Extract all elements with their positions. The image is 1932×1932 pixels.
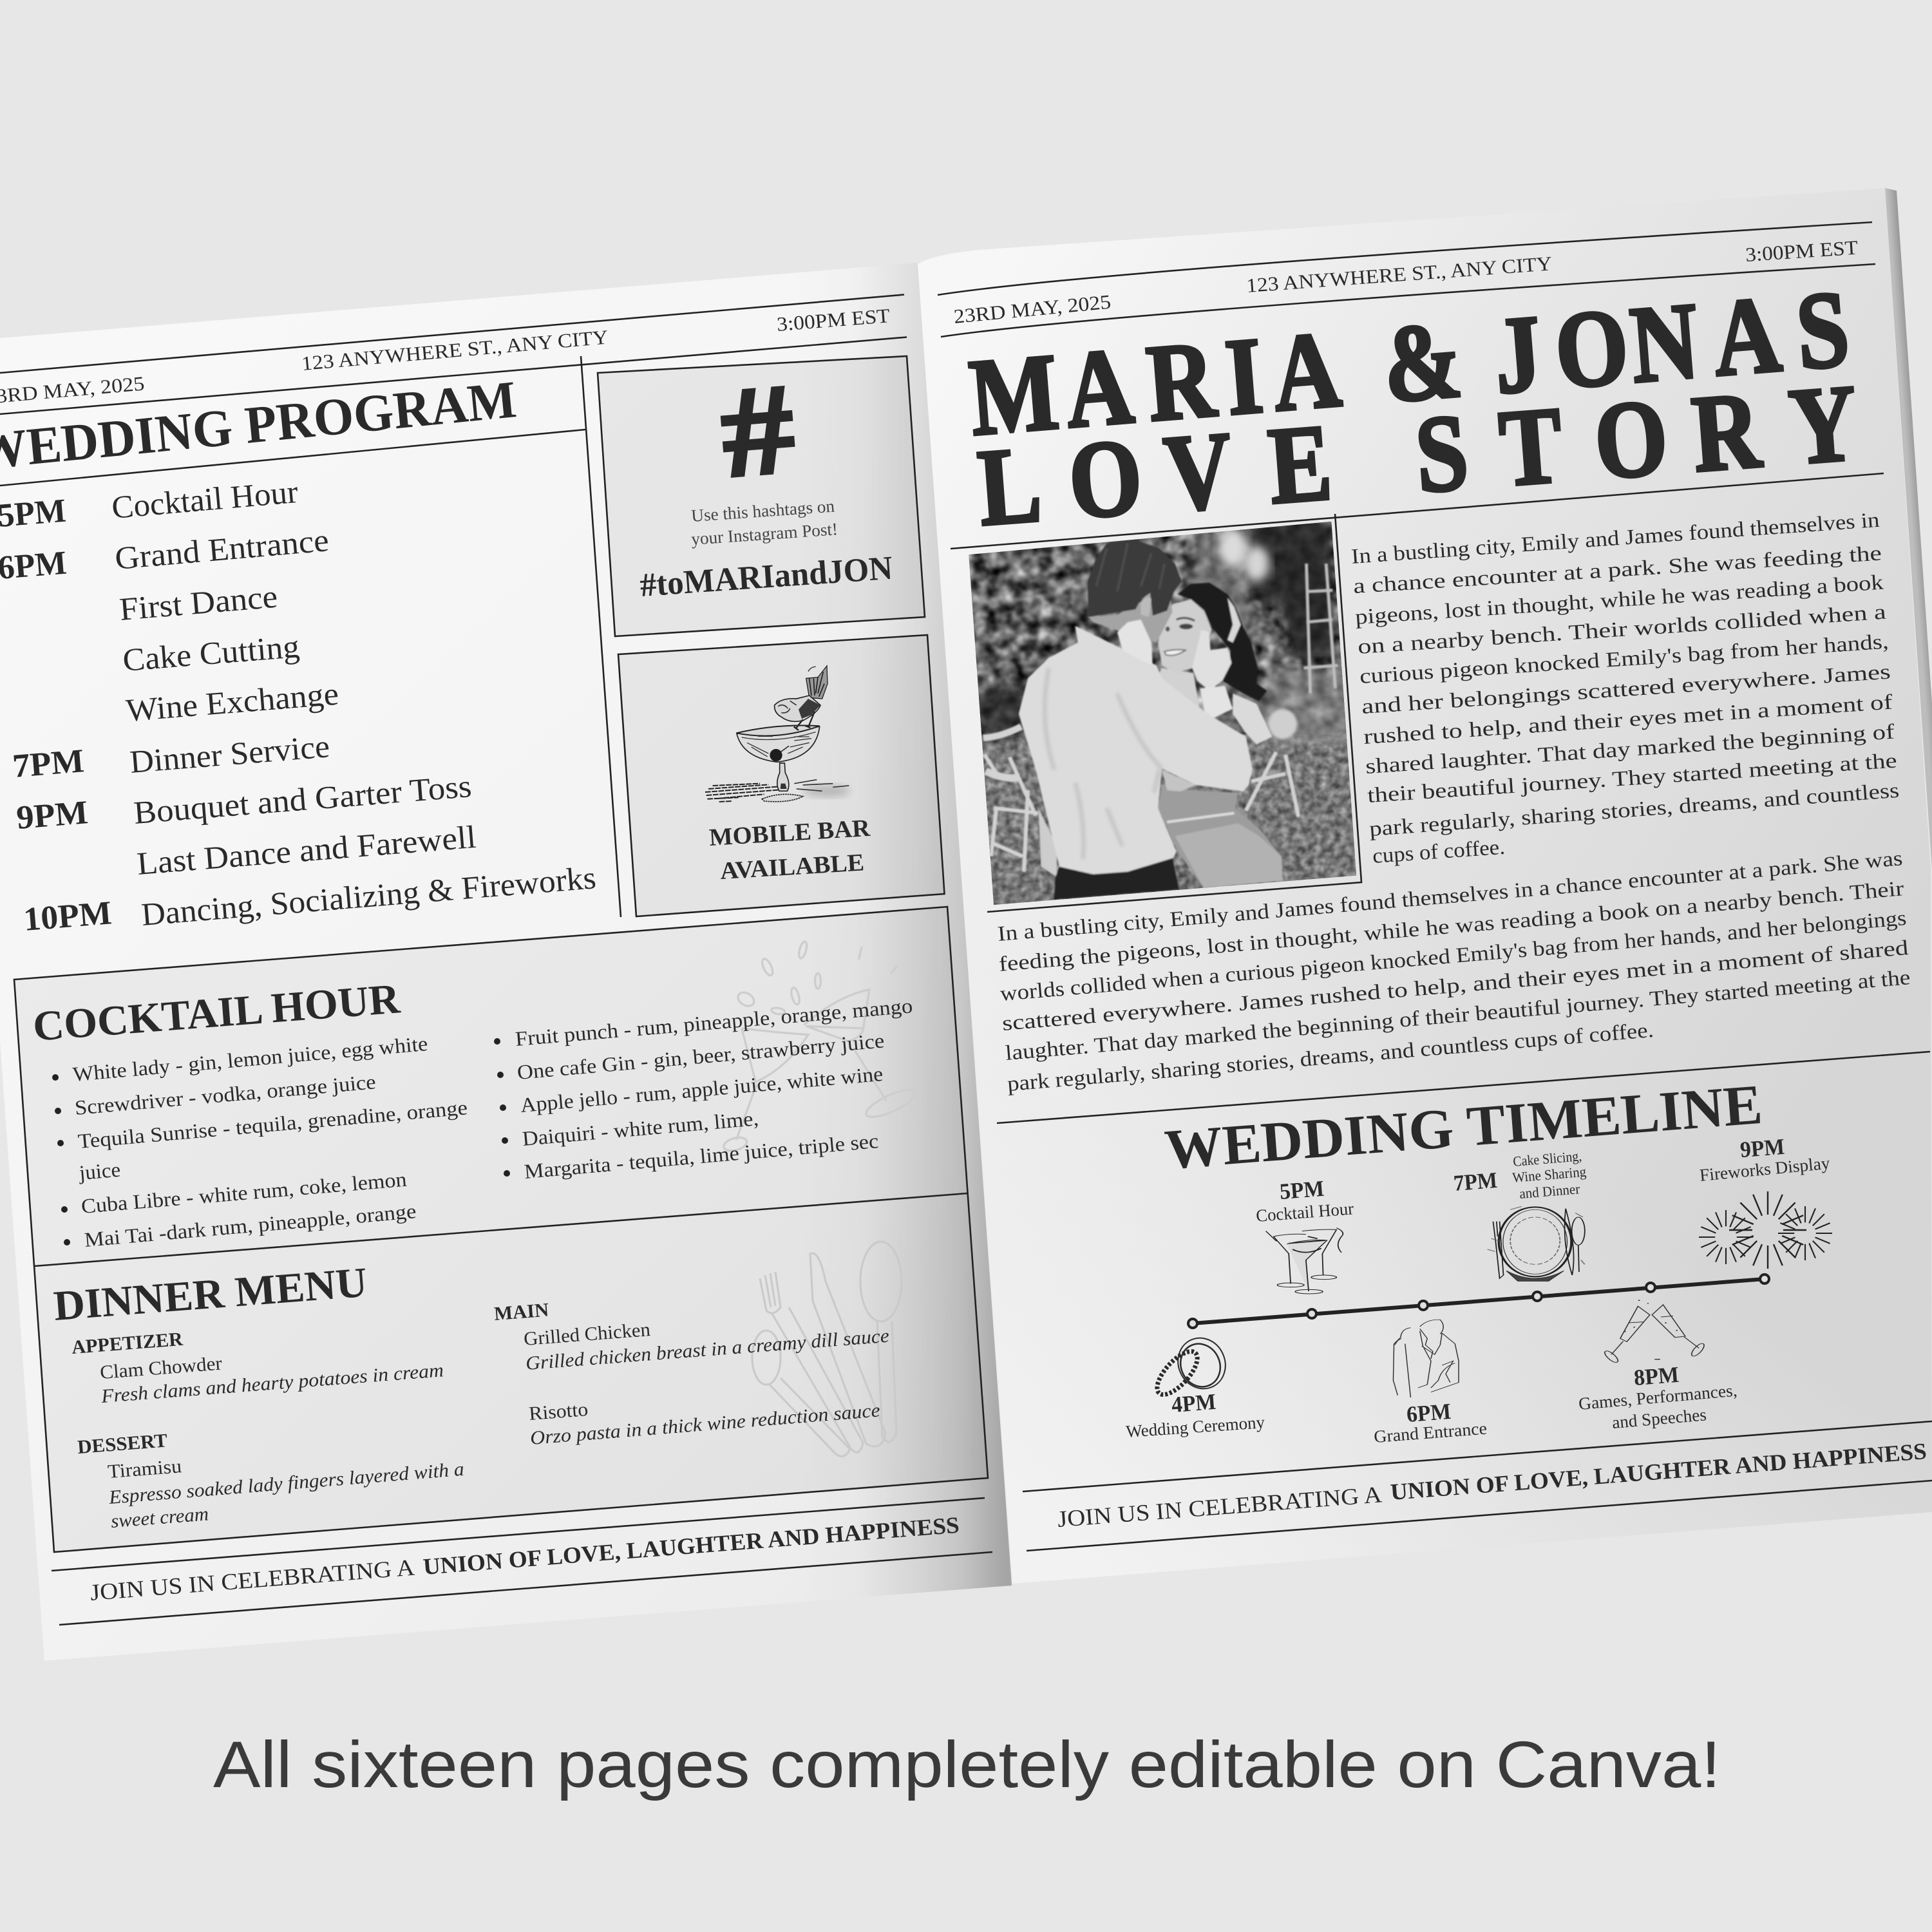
program schedule: Cocktail Hour bbox=[110, 473, 299, 526]
icon: champagne flutes bbox=[1602, 1300, 1707, 1363]
story paragraph one: rushed to help, and their eyes met in a moment of bbox=[1363, 691, 1893, 749]
woman neck and chest bbox=[1159, 667, 1200, 708]
5pm item bbox=[1255, 1176, 1354, 1294]
7pm item: Wine Sharing bbox=[1511, 1163, 1587, 1186]
hashtag instructions: Use this hashtags on bbox=[690, 496, 835, 526]
title: LOVE STORY bbox=[974, 362, 1861, 549]
heading: wedding timeline: WEDDING TIMELINE bbox=[1162, 1074, 1765, 1182]
address: 123 ANYWHERE ST., ANY CITY bbox=[1245, 252, 1553, 297]
icon: couple line art bbox=[1393, 1320, 1459, 1397]
story paragraph one: shared laughter. That day marked the beginning of bbox=[1365, 721, 1895, 779]
chairs bbox=[983, 726, 1298, 872]
program schedule: Dinner Service bbox=[128, 728, 331, 780]
cocktail list left: White lady - gin, lemon juice, egg white bbox=[71, 1032, 429, 1086]
right footer: JOIN US IN CELEBRATING A bbox=[1057, 1481, 1383, 1532]
7pm item: Cake Slicing, bbox=[1512, 1148, 1582, 1170]
4pm item: Wedding Ceremony bbox=[1125, 1412, 1265, 1441]
story paragraph one: pigeons, lost in thought, while he was reading a book bbox=[1354, 571, 1884, 629]
icon: cocktail watermark bbox=[723, 941, 919, 1153]
menu: dessert bbox=[77, 1430, 465, 1532]
story paragraph two: park regularly, sharing stories, dreams, and countless cups of coffee. bbox=[1007, 1019, 1654, 1096]
left page bbox=[0, 263, 1012, 1661]
6pm item: Grand Entrance bbox=[1373, 1419, 1488, 1446]
cocktail list right: Daiquiri - white rum, lime, bbox=[521, 1106, 759, 1150]
cocktail list right: One cafe Gin - gin, beer, strawberry juice bbox=[516, 1028, 885, 1084]
program schedule: Dancing, Socializing & Fireworks bbox=[140, 859, 598, 933]
panel: mobile bar: AVAILABLE bbox=[719, 849, 865, 885]
icon: cutlery watermark bbox=[752, 1242, 902, 1456]
9pm item: Fireworks Display bbox=[1699, 1153, 1831, 1185]
menu: main: Grilled chicken breast in a creamy dill sauce bbox=[525, 1325, 890, 1374]
date: 23RD MAY, 2025 bbox=[952, 290, 1112, 328]
panel: hashtag bbox=[598, 356, 925, 636]
cocktail list left bbox=[52, 1032, 468, 1251]
right footer: UNION OF LOVE, LAUGHTER AND HAPPINESS bbox=[1390, 1438, 1927, 1505]
program schedule: 9PM bbox=[15, 794, 90, 837]
title bbox=[965, 268, 1861, 549]
story paragraph two: In a bustling city, Emily and James found themselves in a chance encounter at a park. She was bbox=[997, 847, 1904, 946]
shirt bbox=[1019, 626, 1253, 875]
menu: main: Orzo pasta in a thick wine reduction sauce bbox=[529, 1399, 881, 1449]
man head bbox=[1088, 592, 1172, 643]
8pm item bbox=[1578, 1300, 1738, 1432]
story paragraph one: a chance encounter at a park. She was feeding the bbox=[1352, 542, 1882, 598]
9pm item: 9PM bbox=[1739, 1134, 1785, 1162]
menu: dessert: DESSERT bbox=[77, 1430, 168, 1458]
her hand bbox=[1192, 630, 1231, 691]
story paragraph one: curious pigeon knocked Emily's bag from her hands, bbox=[1359, 630, 1889, 688]
woman hair bbox=[1178, 583, 1267, 701]
story paragraph two: worlds collided when a curious pigeon knocked Emily's bag from her hands, and her belongings bbox=[999, 907, 1908, 1006]
story paragraph one: In a bustling city, Emily and James found themselves in bbox=[1350, 509, 1880, 569]
menu: dessert: Espresso soaked lady fingers layered with a bbox=[108, 1459, 465, 1508]
dress bbox=[1158, 785, 1283, 888]
5pm item: 5PM bbox=[1279, 1176, 1325, 1204]
program schedule: Bouquet and Garter Toss bbox=[132, 768, 473, 831]
menu: appetizer: Clam Chowder bbox=[99, 1352, 223, 1383]
cocktail list right: Apple jello - rum, apple juice, white wine bbox=[519, 1062, 884, 1117]
title: MARIA & JONAS bbox=[965, 268, 1853, 459]
program schedule: Grand Entrance bbox=[113, 522, 330, 576]
left footer: UNION OF LOVE, LAUGHTER AND HAPPINESS bbox=[422, 1512, 960, 1580]
cocktail list left: juice bbox=[77, 1158, 121, 1184]
right header bbox=[938, 222, 1875, 337]
menu: appetizer bbox=[71, 1329, 444, 1407]
caption: All sixteen pages completely editable on Canva! bbox=[213, 1728, 1721, 1801]
cocktail list left: Cuba Libre - white rum, coke, lemon bbox=[80, 1168, 408, 1218]
story paragraph one: cups of coffee. bbox=[1372, 836, 1506, 868]
cocktail list left: Mai Tai -dark rum, pineapple, orange bbox=[83, 1199, 417, 1251]
5pm item: Cocktail Hour bbox=[1255, 1198, 1354, 1226]
7pm item: and Dinner bbox=[1519, 1180, 1581, 1202]
panel: hashtag: your Instagram Post! bbox=[690, 519, 838, 549]
her fingers on his neck bbox=[1117, 620, 1153, 665]
8pm item: and Speeches bbox=[1611, 1405, 1707, 1432]
story paragraph two: scattered everywhere. James rushed to help, and their eyes met in a moment of shared bbox=[1001, 936, 1909, 1036]
story paragraph one: park regularly, sharing stories, dreams, and countless bbox=[1368, 779, 1900, 841]
icon: fireworks bbox=[1699, 1191, 1832, 1269]
icon: bird on coupe glass bbox=[705, 666, 850, 802]
6pm item bbox=[1373, 1320, 1488, 1446]
cocktail list left: Screwdriver - vodka, orange juice bbox=[73, 1070, 377, 1119]
left header bbox=[0, 295, 907, 414]
timeline bbox=[1125, 1134, 1832, 1446]
4pm item: 4PM bbox=[1171, 1389, 1217, 1417]
story paragraph two: laughter. That day marked the beginning of their beautiful journey. They started meeting at the bbox=[1005, 966, 1911, 1065]
story paragraph one: their beautiful journey. They started meeting at the bbox=[1367, 749, 1898, 808]
photo of couple bbox=[960, 515, 1372, 914]
cocktail list right bbox=[494, 994, 913, 1183]
program schedule: First Dance bbox=[118, 578, 279, 627]
7pm item bbox=[1453, 1148, 1587, 1281]
8pm item: 8PM bbox=[1633, 1362, 1680, 1390]
7pm item: 7PM bbox=[1453, 1168, 1498, 1196]
paper stack edge bbox=[1885, 188, 1932, 869]
9pm item bbox=[1699, 1134, 1832, 1269]
menu: appetizer: Fresh clams and hearty potatoes in cream bbox=[100, 1359, 444, 1407]
trousers bbox=[1054, 858, 1179, 900]
icon: plate bbox=[1488, 1206, 1585, 1281]
icon: wedding rings bbox=[1151, 1331, 1234, 1401]
story paragraph two bbox=[997, 847, 1911, 1096]
photo backdrop bbox=[960, 515, 1372, 914]
mobile bar label: MOBILE BAR bbox=[708, 815, 871, 851]
icon: cocktail glasses bbox=[1266, 1228, 1343, 1294]
8pm item: Games, Performances, bbox=[1578, 1381, 1738, 1414]
cocktail list left: Tequila Sunrise - tequila, grenadine, orange bbox=[77, 1095, 468, 1153]
program schedule: 10PM bbox=[22, 895, 113, 938]
6pm item: 6PM bbox=[1406, 1399, 1452, 1427]
program schedule: Last Dance and Farewell bbox=[135, 819, 477, 882]
menu: appetizer: APPETIZER bbox=[71, 1329, 184, 1358]
time: 3:00PM EST bbox=[776, 304, 891, 336]
left footer: JOIN US IN CELEBRATING A bbox=[89, 1554, 415, 1605]
panel: mobile bar bbox=[618, 635, 944, 916]
timeline axis bbox=[1188, 1274, 1769, 1328]
woman face bbox=[1158, 599, 1212, 673]
icon: hash: # bbox=[716, 357, 799, 505]
menu: main bbox=[493, 1300, 890, 1449]
cocktail list right: Fruit punch - rum, pineapple, orange, mango bbox=[515, 994, 913, 1050]
story paragraph one bbox=[1350, 509, 1900, 868]
heading: dinner menu: DINNER MENU bbox=[52, 1259, 369, 1330]
left footer bbox=[52, 1498, 992, 1625]
menu: main: MAIN bbox=[493, 1300, 550, 1325]
story paragraph one: and her belongings scattered everywhere. James bbox=[1361, 661, 1891, 719]
right page bbox=[918, 188, 1932, 1584]
time: 3:00PM EST bbox=[1745, 236, 1859, 266]
panel: cocktail and dinner bbox=[14, 907, 988, 1552]
address: 123 ANYWHERE ST., ANY CITY bbox=[301, 325, 609, 375]
right footer bbox=[1023, 1421, 1932, 1551]
program schedule bbox=[0, 473, 598, 938]
program schedule: Cake Cutting bbox=[121, 628, 301, 678]
4pm item bbox=[1125, 1331, 1265, 1441]
menu: main: Grilled Chicken bbox=[523, 1319, 651, 1350]
story paragraph one: on a nearby bench. Their worlds collided when a bbox=[1357, 601, 1887, 659]
program schedule: 7PM bbox=[11, 743, 86, 785]
menu: dessert: sweet cream bbox=[110, 1503, 209, 1532]
menu: main: Risotto bbox=[528, 1399, 589, 1425]
couple figures bbox=[1019, 538, 1283, 900]
story paragraph two: feeding the pigeons, lost in thought, while he was reading a book on a nearby bench. Their bbox=[998, 877, 1905, 976]
hashtag: #toMARIandJON bbox=[639, 550, 894, 604]
program schedule: Wine Exchange bbox=[124, 676, 340, 728]
cocktail list right: Margarita - tequila, lime juice, triple sec bbox=[523, 1129, 880, 1183]
heading: cocktail hour: COCKTAIL HOUR bbox=[32, 975, 402, 1050]
menu: dessert: Tiramisu bbox=[107, 1455, 182, 1482]
